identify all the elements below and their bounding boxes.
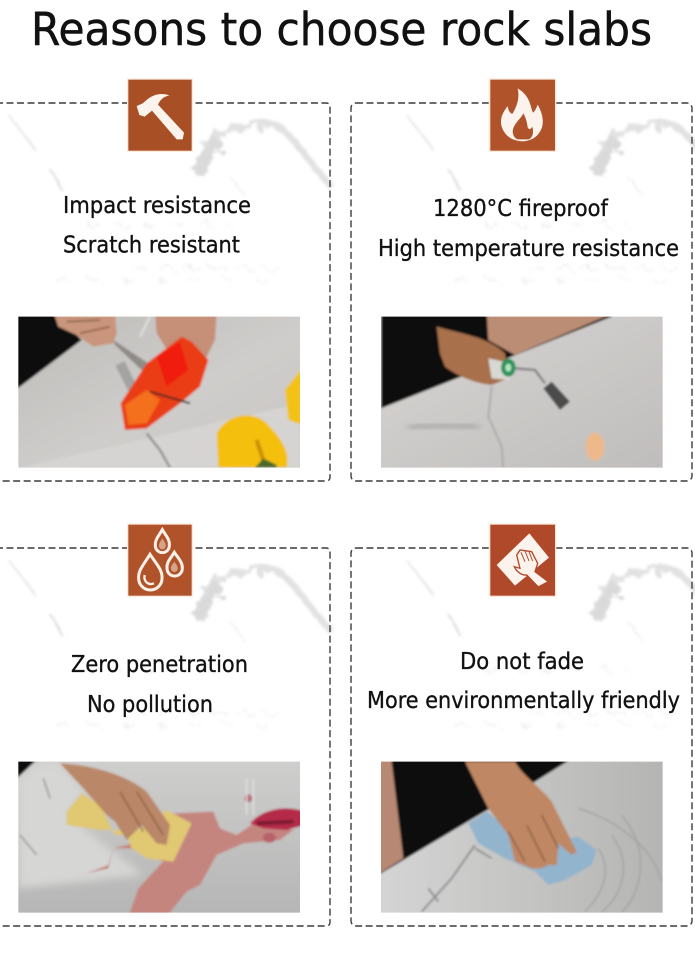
photo: torch on slab <box>375 312 668 472</box>
text: fireproof <box>378 196 679 262</box>
marble background <box>408 117 695 280</box>
photo: wiping slab with blue cloth <box>375 757 668 917</box>
marble background <box>10 562 330 725</box>
marble background <box>10 117 330 280</box>
text: impact resistance <box>63 193 251 258</box>
icon: hammer <box>127 78 193 152</box>
panel: fireproof <box>351 78 695 481</box>
panel: zero penetration <box>0 523 330 926</box>
dashed border <box>0 103 330 481</box>
text: zero penetration <box>71 652 248 718</box>
panel: impact resistance <box>0 78 330 481</box>
text: zero penetration: No pollution <box>87 692 213 718</box>
photo: cutting a pepper <box>13 312 307 472</box>
icon: water drops <box>127 523 193 597</box>
icon: flame <box>489 78 556 152</box>
icon: cloth and hand <box>489 523 556 597</box>
title: Reasons to choose rock slabs <box>31 3 652 56</box>
marble background <box>408 562 695 725</box>
text: do not fade: Do not fade <box>460 649 584 675</box>
panel: do not fade <box>351 523 695 926</box>
dashed border <box>351 103 692 481</box>
text: zero penetration: Zero penetration <box>71 652 248 678</box>
text: impact resistance: Impact resistance <box>63 193 251 219</box>
text: fireproof: 1280°C fireproof <box>433 196 609 222</box>
dashed border <box>0 548 330 926</box>
dashed border <box>351 548 692 926</box>
photo: wiping wine spill <box>13 757 307 917</box>
text: do not fade <box>367 649 680 714</box>
text: impact resistance: Scratch resistant <box>63 232 240 258</box>
